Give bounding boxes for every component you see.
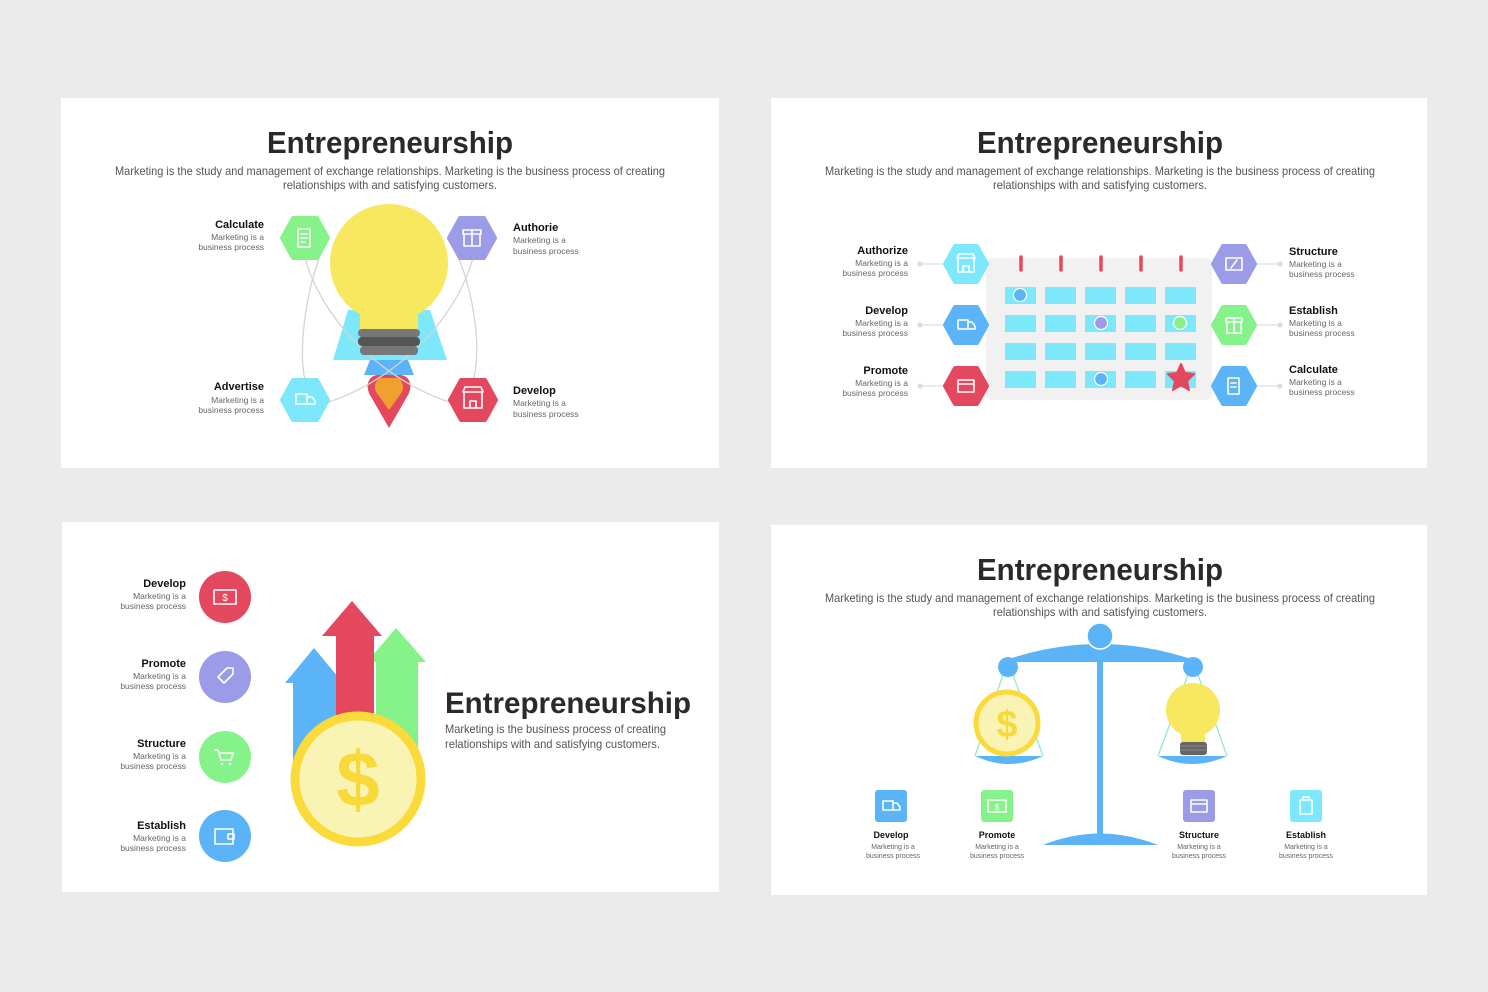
title: Entrepreneurship: [267, 125, 513, 160]
label: structure: business process: [1172, 853, 1227, 860]
label: promote: Marketing is a: [855, 378, 908, 388]
icon: establish square: [1290, 790, 1322, 822]
label: develop: Develop: [873, 830, 909, 840]
label: promote: Promote: [979, 830, 1015, 840]
icon: structure square: [1183, 790, 1215, 822]
text block: relationships with and satisfying customers.: [445, 737, 660, 751]
title: Entrepreneurship: [977, 552, 1223, 587]
illustration: rocket bulb: [305, 204, 473, 428]
subtitle: [115, 164, 665, 192]
subtitle: [825, 591, 1375, 619]
label: promote: Marketing is a: [133, 671, 186, 681]
title: Entrepreneurship: [977, 125, 1223, 160]
label: establish: Marketing is a: [1284, 844, 1328, 851]
icon: structure circle: [199, 731, 251, 783]
icon: authorie hexagon: [449, 218, 495, 258]
subtitle: [825, 164, 1375, 192]
label: develop: Marketing is a: [513, 398, 566, 408]
icon: promote square: $: [995, 803, 1000, 812]
label: promote: business process: [842, 388, 908, 398]
label: calculate: [1289, 364, 1355, 397]
label: establish: [1279, 830, 1334, 860]
label: authorie: Authorie: [513, 222, 558, 234]
icon: promote: [945, 368, 987, 404]
panel: lightbulb rocket: [61, 98, 719, 468]
subtitle: relationships with and satisfying customers.: [993, 605, 1207, 619]
label: establish: Establish: [1286, 830, 1326, 840]
label: develop: Develop: [143, 578, 186, 590]
illustration: balance scale: $: [996, 704, 1018, 746]
calendar chart: [986, 257, 1212, 400]
label: structure: [120, 738, 186, 771]
icon: establish circle: [199, 810, 251, 862]
label: authorize: Authorize: [857, 245, 908, 257]
label: establish: Establish: [137, 820, 186, 832]
label: calculate: [198, 219, 264, 252]
label: promote: business process: [120, 681, 186, 691]
label: develop: Marketing is a: [871, 844, 915, 851]
subtitle: Marketing is the study and management of exchange relationships. Marketing is the business process of creating: [115, 164, 665, 178]
label: develop: [866, 830, 921, 860]
label: establish: Establish: [1289, 305, 1338, 317]
label: develop: business process: [866, 853, 921, 860]
label: authorize: [842, 245, 908, 278]
label: develop: Develop: [865, 305, 908, 317]
label: structure: Marketing is a: [133, 751, 186, 761]
label: develop: Develop: [513, 385, 556, 397]
label: authorize: business process: [842, 268, 908, 278]
subtitle: relationships with and satisfying customers.: [993, 178, 1207, 192]
title: Entrepreneurship: [445, 687, 691, 720]
label: establish: business process: [120, 843, 186, 853]
subtitle: Marketing is the study and management of exchange relationships. Marketing is the business process of creating: [825, 164, 1375, 178]
label: develop: [842, 305, 908, 338]
label: calculate: Marketing is a: [1289, 377, 1342, 387]
label: promote: [970, 830, 1025, 860]
icon: advertise hexagon: [282, 380, 328, 420]
panel: growth arrows: [62, 522, 719, 892]
label: authorie: [513, 222, 579, 256]
label: promote: [120, 658, 186, 691]
label: develop: [513, 385, 579, 419]
label: structure: Marketing is a: [1289, 259, 1342, 269]
label: promote: business process: [970, 853, 1025, 860]
label: structure: Structure: [137, 738, 186, 750]
illustration: arrows and coin: $: [336, 735, 380, 823]
label: promote: [842, 365, 908, 398]
label: structure: business process: [1289, 269, 1355, 279]
subtitle: Marketing is the study and management of exchange relationships. Marketing is the business process of creating: [825, 591, 1375, 605]
icon: authorize: [945, 246, 987, 282]
label: advertise: business process: [198, 405, 264, 415]
label: promote: Marketing is a: [975, 844, 1019, 851]
label: calculate: Calculate: [1289, 364, 1338, 376]
text block: Marketing is the business process of creating: [445, 722, 666, 736]
icon: calculate hexagon: [282, 218, 328, 258]
label: advertise: Advertise: [214, 381, 264, 393]
panel: scale: [771, 525, 1427, 895]
label: establish: [1289, 305, 1355, 338]
label: authorize: Marketing is a: [855, 258, 908, 268]
label: promote: Promote: [141, 658, 186, 670]
icon: promote circle: [199, 651, 251, 703]
icon: develop square: [875, 790, 907, 822]
icon: develop: [945, 307, 987, 343]
label: advertise: [198, 381, 264, 415]
label: promote: Promote: [863, 365, 908, 377]
label: structure: [1289, 246, 1355, 279]
label: advertise: Marketing is a: [211, 395, 264, 405]
label: calculate: Marketing is a: [211, 232, 264, 242]
icon: establish: [1213, 307, 1255, 343]
label: structure: Marketing is a: [1177, 844, 1221, 851]
label: authorie: business process: [513, 246, 579, 256]
label: calculate: business process: [198, 242, 264, 252]
label: develop: Marketing is a: [133, 591, 186, 601]
label: develop: [120, 578, 186, 611]
label: calculate: Calculate: [215, 219, 264, 231]
label: establish: [120, 820, 186, 853]
label: establish: business process: [1289, 328, 1355, 338]
illustration: arrows and coin: [285, 601, 426, 842]
outer curves: [302, 235, 477, 380]
label: develop: business process: [842, 328, 908, 338]
label: structure: business process: [120, 761, 186, 771]
illustration: balance scale: [975, 623, 1227, 845]
label: structure: [1172, 830, 1227, 860]
label: establish: Marketing is a: [1289, 318, 1342, 328]
connector lines: [918, 262, 1282, 388]
label: develop: business process: [513, 409, 579, 419]
label: establish: Marketing is a: [133, 833, 186, 843]
icon: develop circle: $: [222, 593, 228, 604]
label: develop: Marketing is a: [855, 318, 908, 328]
icon: develop hexagon: [450, 380, 496, 420]
label: establish: business process: [1279, 853, 1334, 860]
label: structure: Structure: [1289, 246, 1338, 258]
icon: structure: [1213, 246, 1255, 282]
label: develop: business process: [120, 601, 186, 611]
icon: promote square: [981, 790, 1013, 822]
text block: [445, 722, 666, 751]
subtitle: relationships with and satisfying customers.: [283, 178, 497, 192]
icon: calculate: [1213, 368, 1255, 404]
label: calculate: business process: [1289, 387, 1355, 397]
label: structure: Structure: [1179, 830, 1219, 840]
label: authorie: Marketing is a: [513, 235, 566, 245]
icon: develop circle: [199, 571, 251, 623]
panel: calendar: [771, 98, 1427, 468]
